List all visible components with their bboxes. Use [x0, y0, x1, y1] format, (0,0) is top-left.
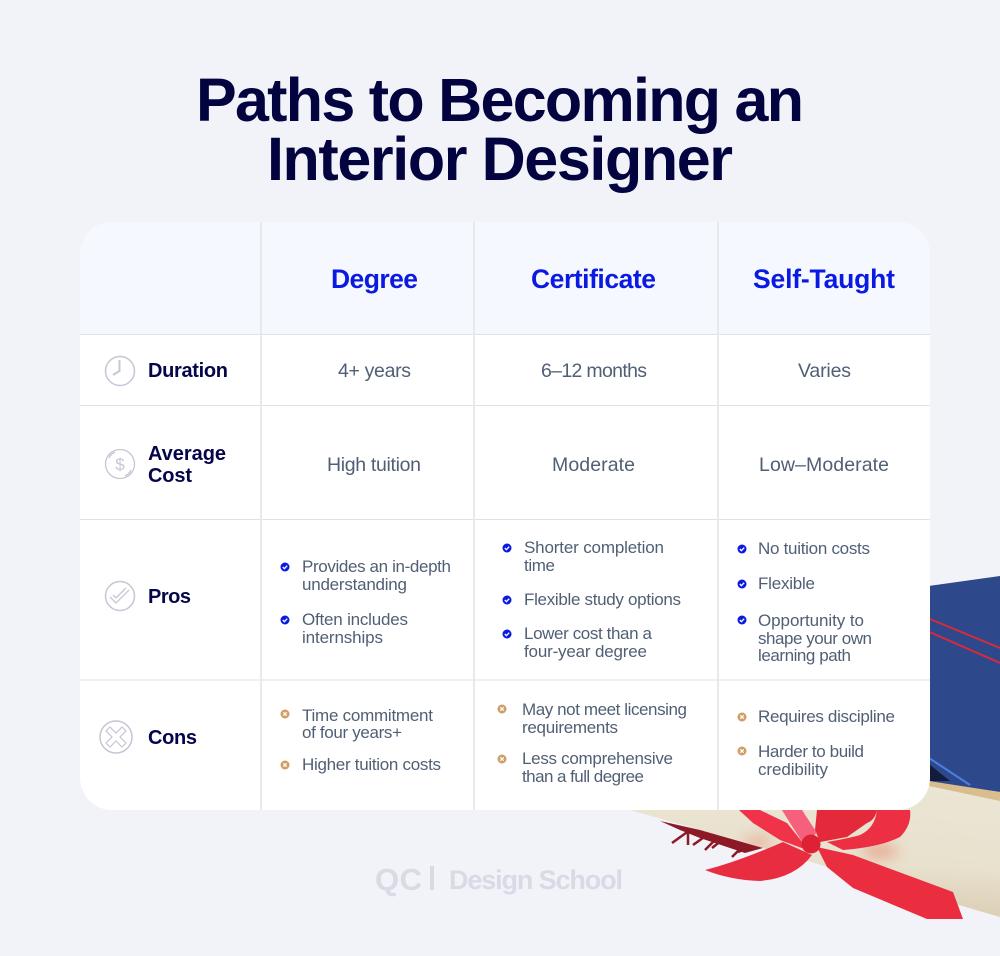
row: duration: 6–12 months	[541, 360, 647, 382]
title: Paths to Becoming an	[196, 66, 804, 134]
degree pros	[280, 557, 451, 647]
degree cons: Higher tuition costs	[302, 755, 441, 774]
icon: dollar coin: $	[115, 455, 125, 474]
row: pros	[106, 538, 872, 665]
row: cons	[100, 700, 895, 786]
self-taught pros: Flexible	[758, 574, 815, 593]
row: average cost: Moderate	[552, 454, 635, 476]
self-taught pros: No tuition costs	[758, 539, 870, 558]
degree pros: Provides an in-depth	[302, 557, 451, 576]
certificate pros: four-year degree	[524, 642, 647, 661]
diploma scroll	[610, 778, 1000, 917]
title: Interior Designer	[267, 125, 733, 193]
row: average cost: High tuition	[327, 454, 421, 476]
row: average cost	[106, 443, 889, 487]
column headings: Certificate	[531, 264, 656, 294]
self-taught pros: Opportunity to	[758, 611, 864, 630]
column headings: Self-Taught	[753, 264, 895, 294]
certificate cons	[498, 700, 687, 786]
certificate cons: May not meet licensing	[522, 700, 687, 719]
column headings: Degree	[331, 264, 418, 294]
red ribbon bow	[705, 810, 963, 919]
icon: check mark	[106, 582, 134, 610]
row: average cost: Low–Moderate	[759, 454, 889, 476]
self-taught cons: Requires discipline	[758, 707, 895, 726]
row: pros: Pros	[148, 586, 191, 608]
row: duration: Varies	[798, 360, 851, 382]
certificate cons: Less comprehensive	[522, 749, 673, 768]
certificate pros: time	[524, 556, 555, 575]
row: average cost: Average	[148, 443, 226, 465]
row: duration	[106, 356, 851, 386]
column headings	[331, 264, 895, 294]
degree pros: understanding	[302, 575, 407, 594]
degree cons: of four years+	[302, 723, 402, 742]
certificate pros: Flexible study options	[524, 590, 681, 609]
comparison table panel	[80, 222, 930, 810]
icon: cross	[100, 721, 132, 753]
certificate pros: Lower cost than a	[524, 624, 653, 643]
row: duration: Duration	[148, 360, 228, 382]
certificate pros	[502, 538, 681, 661]
self-taught pros	[738, 539, 872, 665]
row: cons: Cons	[148, 727, 197, 749]
diploma tassel	[660, 821, 763, 857]
degree pros: Often includes	[302, 610, 408, 629]
row: average cost: Cost	[148, 465, 192, 487]
certificate cons: requirements	[522, 718, 618, 737]
icon: clock	[106, 356, 134, 386]
logo: QC Design School: QC	[375, 862, 422, 897]
self-taught cons: Harder to build	[758, 742, 864, 761]
certificate cons: than a full degree	[522, 767, 644, 786]
degree cons: Time commitment	[302, 706, 433, 725]
self-taught cons: credibility	[758, 760, 828, 779]
self-taught pros: learning path	[758, 646, 851, 665]
row: duration: 4+ years	[338, 360, 411, 382]
graduation cap	[900, 576, 1000, 792]
certificate pros: Shorter completion	[524, 538, 664, 557]
degree pros: internships	[302, 628, 383, 647]
logo: QC Design School: Design School	[449, 865, 623, 895]
self-taught cons	[738, 707, 895, 779]
self-taught pros: shape your own	[758, 629, 872, 648]
degree cons	[280, 706, 441, 774]
icon: dollar coin	[106, 450, 134, 478]
logo: QC Design School	[375, 862, 623, 897]
ribbon shadow glow on paper	[744, 837, 898, 858]
illustration: graduation cap and diploma	[610, 576, 1000, 919]
title	[196, 66, 804, 193]
